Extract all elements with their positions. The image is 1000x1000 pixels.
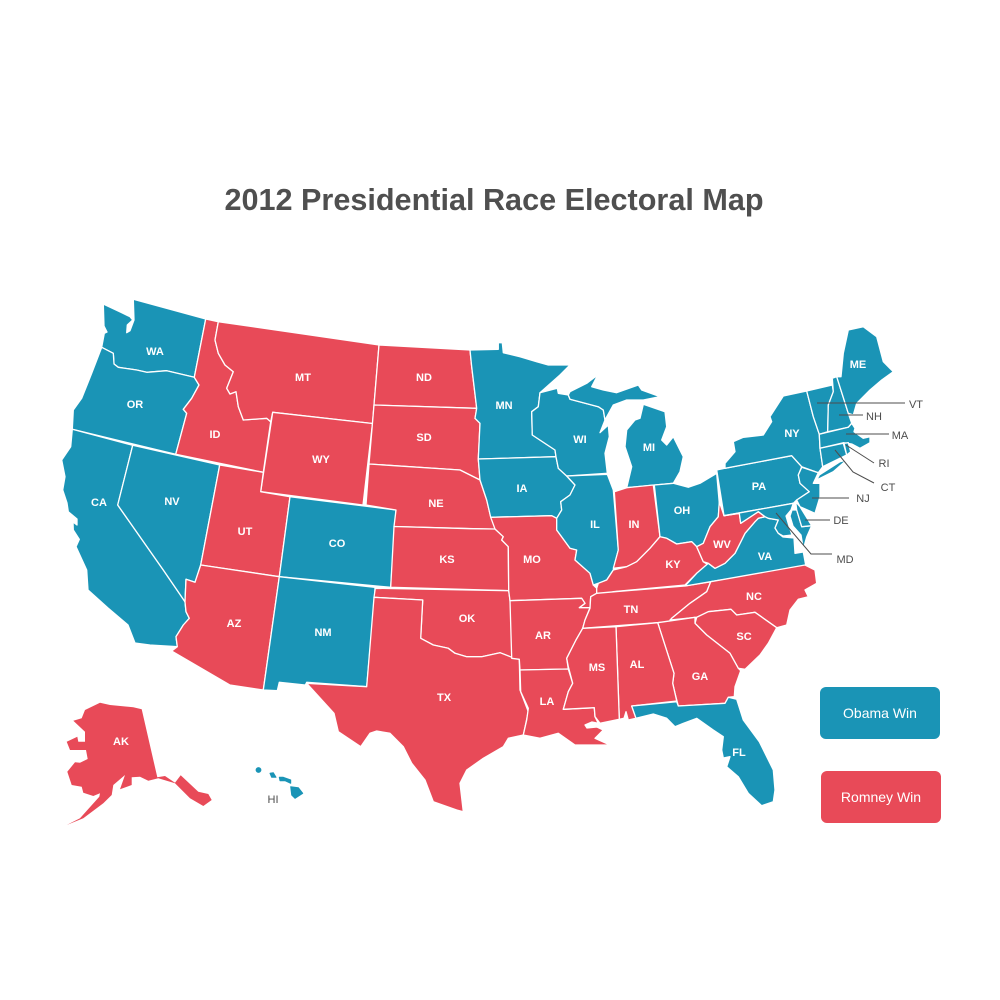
state abbreviations: MI bbox=[643, 442, 655, 454]
state abbreviations: UT bbox=[238, 526, 253, 538]
state abbreviations: WV bbox=[713, 539, 732, 551]
state abbreviations: FL bbox=[732, 747, 746, 759]
state: WY bbox=[261, 412, 372, 505]
state: FL bbox=[632, 697, 775, 806]
state: SC bbox=[695, 609, 777, 669]
state abbreviations: KY bbox=[665, 559, 681, 571]
state: AL bbox=[616, 623, 677, 720]
state: KY bbox=[597, 537, 708, 597]
title: 2012 Presidential Race Electoral Map bbox=[224, 183, 764, 217]
leader lines and outside labels: MA bbox=[892, 430, 909, 442]
state abbreviations: MT bbox=[295, 372, 311, 384]
state abbreviations: NV bbox=[164, 496, 180, 508]
state abbreviations: TN bbox=[624, 604, 638, 616]
state: MO bbox=[491, 516, 597, 608]
state: ME bbox=[837, 327, 893, 415]
state: MT bbox=[215, 322, 379, 424]
state abbreviations: IL bbox=[590, 519, 600, 531]
leader lines and outside labels: MD bbox=[836, 554, 854, 566]
state abbreviations: ID bbox=[210, 429, 221, 441]
state: MA bbox=[819, 423, 870, 448]
state: HI bbox=[256, 768, 303, 798]
state: OR bbox=[72, 347, 199, 454]
state abbreviations: OH bbox=[674, 505, 690, 517]
state: ID bbox=[176, 319, 271, 472]
state: WV bbox=[697, 502, 765, 568]
state: OH bbox=[654, 473, 719, 547]
state: NJ bbox=[797, 467, 820, 513]
state abbreviations: AL bbox=[630, 659, 645, 671]
state: NC bbox=[670, 565, 817, 628]
state abbreviations: WY bbox=[312, 454, 331, 466]
state abbreviations: MN bbox=[495, 400, 513, 412]
state: ND bbox=[374, 345, 477, 408]
state abbreviations: SC bbox=[736, 631, 752, 643]
state: AK bbox=[67, 703, 212, 825]
state: NY bbox=[725, 391, 847, 480]
state abbreviations: NE bbox=[428, 498, 444, 510]
state abbreviations: VA bbox=[758, 551, 772, 563]
state: TN bbox=[583, 582, 711, 628]
state abbreviations: IA bbox=[516, 483, 528, 495]
state: VA bbox=[685, 517, 806, 586]
state abbreviations: OR bbox=[127, 399, 143, 411]
state: IN bbox=[613, 485, 660, 568]
map of states bbox=[62, 299, 893, 825]
state: IL bbox=[557, 474, 618, 585]
state: RI bbox=[844, 443, 851, 455]
state abbreviations: NM bbox=[314, 627, 332, 639]
state: TX bbox=[307, 597, 528, 812]
state abbreviations bbox=[91, 346, 866, 759]
state abbreviations: CO bbox=[329, 538, 346, 550]
state abbreviations: AR bbox=[535, 630, 551, 642]
state: WA bbox=[102, 299, 206, 377]
state: VT bbox=[807, 385, 833, 434]
state: NE bbox=[366, 464, 497, 529]
state: NM bbox=[263, 577, 375, 691]
state abbreviations: IN bbox=[628, 519, 640, 531]
legend: Obama Win bbox=[820, 687, 940, 739]
state: CA bbox=[62, 429, 189, 647]
leader lines and outside labels: NH bbox=[866, 411, 882, 423]
state abbreviations: MO bbox=[523, 554, 541, 566]
state: PA bbox=[717, 456, 809, 516]
state abbreviations: AZ bbox=[227, 618, 242, 630]
state: DE bbox=[796, 502, 812, 527]
legend: Obama Win: Obama Win bbox=[843, 705, 917, 721]
state: MN bbox=[470, 343, 570, 459]
state abbreviations: NY bbox=[784, 428, 800, 440]
state abbreviations: ME bbox=[850, 359, 866, 371]
state: IA bbox=[478, 457, 575, 518]
state abbreviations: NC bbox=[746, 591, 762, 603]
state: WI bbox=[532, 388, 609, 476]
legend: Romney Win bbox=[821, 771, 941, 823]
leader lines and outside labels: RI bbox=[878, 458, 890, 470]
state: CO bbox=[279, 497, 396, 587]
state: NH bbox=[828, 377, 852, 432]
state abbreviations: CA bbox=[91, 497, 107, 509]
state: KS bbox=[391, 526, 509, 591]
state abbreviations: AK bbox=[113, 736, 129, 748]
leader lines and outside labels: VT bbox=[909, 399, 923, 411]
state abbreviations: TX bbox=[437, 692, 452, 704]
leader lines and outside labels: CT bbox=[881, 482, 896, 494]
state: MD bbox=[724, 503, 812, 549]
state: AZ bbox=[172, 565, 279, 690]
state: GA bbox=[658, 617, 741, 706]
state: AR bbox=[510, 598, 590, 670]
state abbreviations: MS bbox=[589, 662, 605, 674]
state abbreviations: KS bbox=[439, 554, 455, 566]
leader lines and outside labels: NJ bbox=[856, 493, 870, 505]
state abbreviations: ND bbox=[416, 372, 432, 384]
legend: Romney Win: Romney Win bbox=[841, 789, 921, 805]
state: LA bbox=[520, 669, 610, 745]
state abbreviations: WA bbox=[146, 346, 164, 358]
state abbreviations: PA bbox=[752, 481, 766, 493]
state: SD bbox=[369, 405, 480, 480]
state: OK bbox=[374, 588, 512, 657]
state abbreviations: LA bbox=[540, 696, 554, 708]
state abbreviations: GA bbox=[692, 671, 708, 683]
state abbreviations: WI bbox=[573, 434, 587, 446]
leader lines and outside labels: HI bbox=[268, 794, 278, 806]
state: MS bbox=[563, 627, 619, 723]
state: UT bbox=[201, 465, 290, 577]
state: NV bbox=[118, 445, 220, 602]
state abbreviations: OK bbox=[459, 613, 475, 625]
state abbreviations: SD bbox=[416, 432, 432, 444]
leader lines and outside labels: DE bbox=[833, 515, 849, 527]
state: CT bbox=[820, 443, 847, 467]
leader lines and outside labels bbox=[268, 399, 923, 806]
state: MI bbox=[568, 375, 683, 488]
